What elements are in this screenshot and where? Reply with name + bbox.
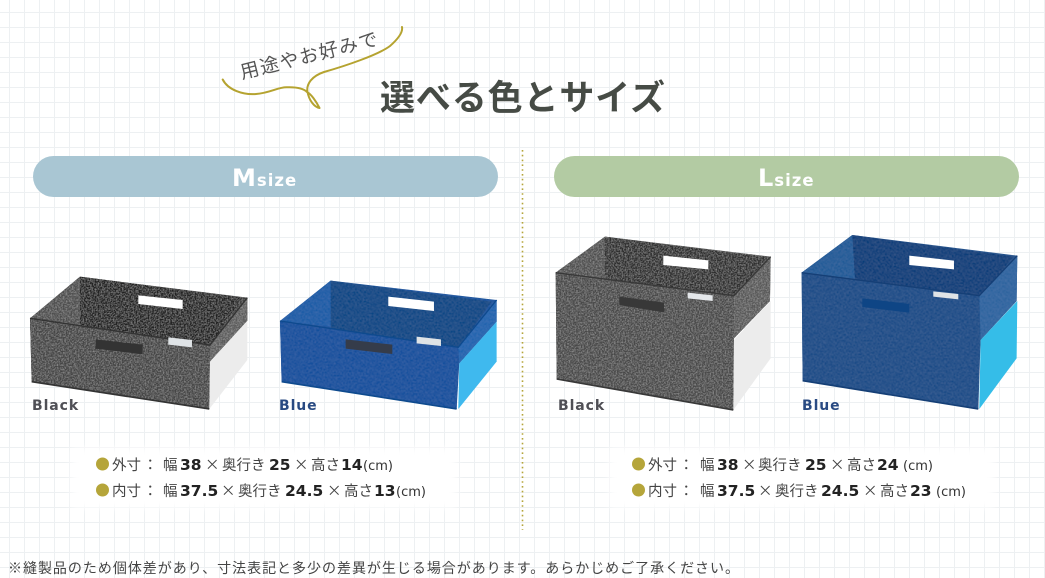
outer dimensions: 幅 [163,454,178,475]
inner dimensions: 24.5 [285,482,323,500]
ribbon curve [223,27,402,108]
outer dimensions: × [830,454,844,475]
M size header pill [33,156,498,197]
L black felt box [556,237,771,410]
outer dimensions: ： [143,454,158,475]
inner dimensions: 高さ [344,480,373,501]
fabric tag [933,291,958,299]
outer dimensions: × [205,454,220,475]
inner dimensions: (cm) [936,485,966,500]
label: M Blue: Blue [279,398,318,414]
bullet: outer [632,458,645,470]
inner dimensions: 37.5 [180,482,218,500]
bullet: outer [96,458,109,470]
fabric tag [417,337,441,346]
outer dimensions: 38 [717,456,739,474]
label: M Black: Black [32,398,79,414]
L blue felt box [802,235,1017,409]
outer dimensions: 14 [341,456,363,474]
outer dimensions: (cm) [903,459,933,474]
L size dimensions [610,448,994,508]
outer dimensions: 高さ [847,454,876,475]
divider: dotted vertical line [522,150,524,530]
L size header pill: Lsize [758,164,815,192]
inner dimensions: × [327,480,342,501]
outer dimensions: × [294,454,308,475]
inner dimensions: 23 [910,482,932,500]
inner dimensions: 37.5 [717,482,755,500]
M size dimensions [72,448,456,508]
inner dimensions: 幅 [700,480,714,501]
subtitle text: 用途やお好みで [237,25,380,85]
M size header pill: Msize [232,164,297,192]
fabric tag [168,337,192,347]
footnote: ※縫製品のため個体差があり、寸法表記と多少の差異が生じる場合があります。あらかじめご了承ください。 [8,558,739,578]
outer dimensions: 24 [877,456,899,474]
outer dimensions: × [742,454,756,475]
outer dimensions: 25 [269,456,291,474]
fabric tag [688,293,713,301]
subtitle ribbon: 用途やお好みで [223,25,402,108]
outer dimensions: 幅 [700,454,714,475]
outer dimensions: 外寸 [112,454,141,475]
inner dimensions: 奥行き [238,480,282,501]
inner dimensions: ： [679,480,694,501]
inner dimensions: ： [143,480,158,501]
inner dimensions: 高さ [880,480,909,501]
inner dimensions: 幅 [163,480,178,501]
label: L Black: Black [558,398,605,414]
outer dimensions: ： [679,454,694,475]
inner dimensions: 内寸 [112,480,141,501]
outer dimensions: (cm) [363,459,393,474]
inner dimensions: 24.5 [821,482,859,500]
outer dimensions: 38 [180,456,202,474]
outer dimensions: 高さ [311,454,340,475]
outer dimensions: 奥行き [222,454,266,475]
inner dimensions: 13 [374,482,396,500]
inner dimensions: 奥行き [775,480,818,501]
outer dimensions: 25 [805,456,827,474]
L size header pill [554,156,1019,197]
label: L Blue: Blue [802,398,841,414]
bullet: inner [632,484,645,496]
inner dimensions: × [863,480,878,501]
inner dimensions: (cm) [396,485,426,500]
title: 選べる色とサイズ [380,70,665,121]
inner dimensions: × [758,480,772,501]
bullet: inner [96,484,109,496]
M blue felt box [280,281,497,409]
spec backdrop [72,448,456,508]
inner dimensions: 内寸 [648,480,677,501]
M black felt box [30,277,247,409]
spec backdrop [610,448,994,508]
outer dimensions: 奥行き [758,454,802,475]
outer dimensions: 外寸 [648,454,677,475]
inner dimensions: × [221,480,236,501]
